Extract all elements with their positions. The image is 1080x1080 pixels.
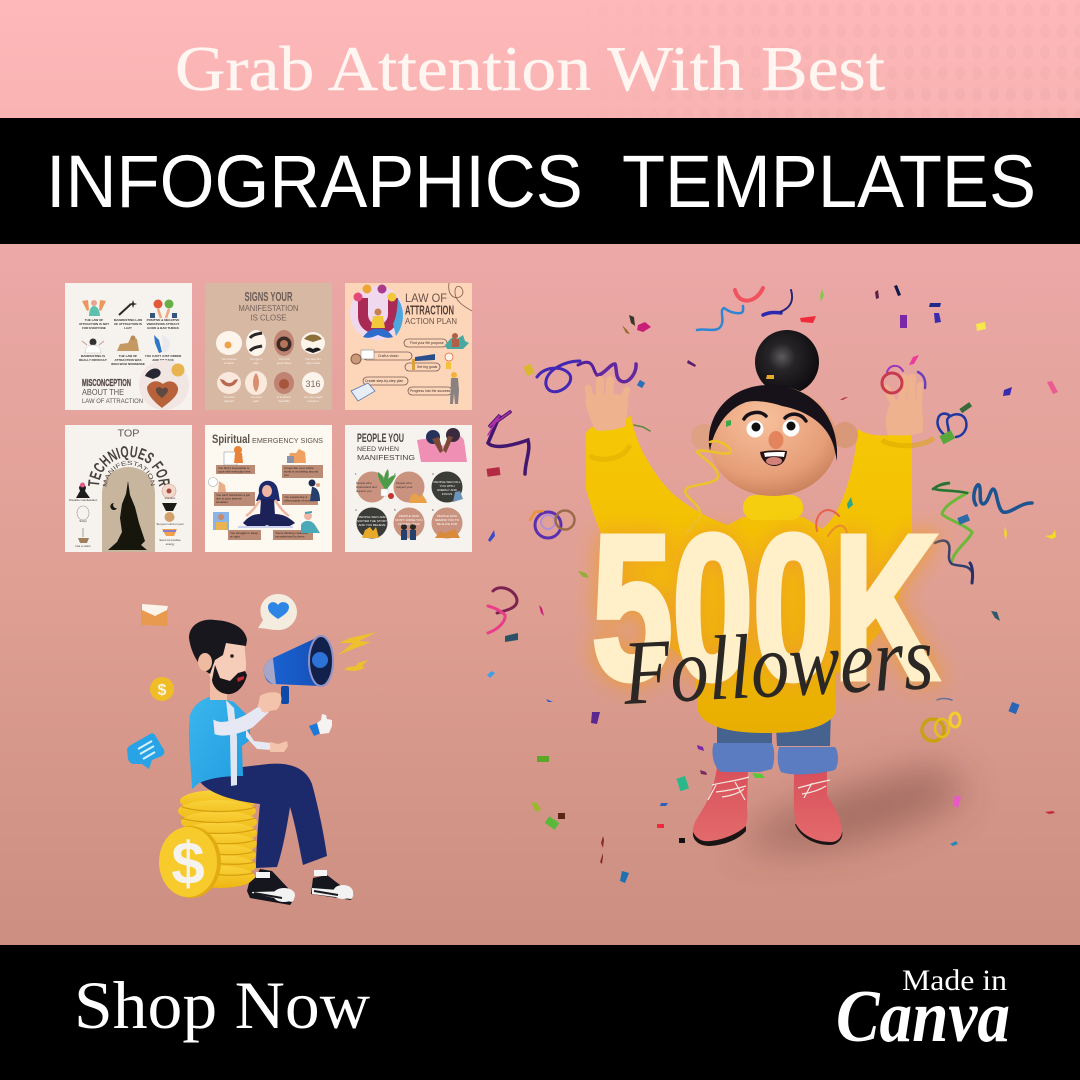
thumbnail 2: signs your manifestation: SIGNS YOUR — [244, 290, 292, 304]
thumbnail 2: signs your manifestation: You see the — [305, 357, 321, 361]
thumbnail 2: signs your manifestation: a vision — [224, 361, 234, 365]
illustration: man with megaphone on coins — [127, 594, 377, 905]
thumbnail 6: people you need when manifesting: DURING YOUR — [398, 522, 420, 526]
shadow under girl — [740, 765, 970, 849]
thumbnail 6: people you need when manifesting: PEOPLE WHO — [399, 514, 420, 518]
confetti: front layer — [487, 285, 1058, 883]
thumbnail 5: spiritual emergency signs: You find it impossible to — [218, 466, 250, 470]
coin stack — [178, 790, 257, 888]
girl nose — [768, 431, 784, 449]
thumbnail 2: signs your manifestation: You get a — [250, 357, 263, 361]
thumbnail 4: top techniques for manifestation: Visualize manifestation — [69, 498, 98, 502]
girl ears — [691, 422, 858, 450]
call to action: shop now: Shop Now — [74, 967, 370, 1043]
thumbnail 5: spiritual emergency signs — [205, 425, 332, 552]
thumbnail 1: misconception: POSITIVE & NEGATIVE — [147, 318, 179, 322]
thumbnail 4: top techniques for manifestation: Set your mind on your — [156, 522, 184, 526]
big number glow: 500K — [592, 493, 938, 722]
thumbnail 1: misconception: THE LAW OF — [119, 354, 137, 358]
thumbnail 5: spiritual emergency signs: anxieties — [216, 500, 228, 504]
thumbnail 2: signs your manifestation: beautiful — [278, 399, 290, 403]
icon: megaphone — [264, 636, 333, 704]
thumbnail 1: misconception: GOOD & BAD THINGS — [147, 326, 179, 330]
girl collar — [743, 495, 803, 520]
thumbnail 5: spiritual emergency signs: you — [284, 473, 289, 477]
thumbnail 6: people you need when manifesting: People who — [396, 481, 412, 485]
confetti: back layer — [488, 288, 1032, 741]
thumbnail 6: people you need when manifesting: NEED WHEN — [357, 446, 399, 453]
icon: big dollar coin — [159, 826, 221, 898]
thumbnail 3: law of attraction action plan: Create step-by-step plan — [365, 379, 403, 383]
thumbnail 5: spiritual emergency signs: It feels like your whole — [284, 466, 314, 470]
thumbnail 2: signs your manifestation: numbers — [307, 399, 319, 403]
girl face — [709, 386, 837, 496]
thumbnail 3: law of attraction action plan: ATTRACTION — [405, 304, 454, 318]
footer band — [0, 945, 1080, 1080]
thumbnail 2: signs your manifestation: calm — [253, 399, 260, 403]
script word: followers: Followers — [620, 606, 936, 724]
thumbnail 1: misconception: MISCONCEPTION — [82, 378, 131, 389]
icon: lightning bolts — [338, 632, 377, 671]
thumbnail 5: spiritual emergency signs: You struggle to sleep — [230, 531, 258, 535]
thumbnail 1: misconception: ATTRACTION WAS — [115, 358, 141, 362]
brand: made in canva: Canva — [836, 976, 1010, 1058]
thumbnail 5: spiritual emergency signs: EMERGENCY SIGNS — [252, 438, 323, 445]
girl right hand — [886, 378, 923, 435]
thumbnail 5: spiritual emergency signs: overwhelmed by them — [275, 534, 305, 538]
thumbnail 6: people you need when manifesting: YOU WITH — [440, 484, 454, 488]
thumbnail 5: spiritual emergency signs: You're thinking creatively — [275, 531, 308, 535]
thumbnail 1: misconception: ABOUT THE — [82, 388, 124, 397]
icon: big dollar coin: $ — [171, 830, 205, 897]
girl left hand — [586, 380, 628, 430]
icon: dollar coin small — [150, 677, 174, 701]
thumbnail 1: misconception: ATTRACTION IS NOT — [79, 322, 109, 326]
icon: dollar coin small: $ — [158, 682, 167, 699]
thumbnail 3: law of attraction action plan: LAW OF — [405, 291, 447, 305]
thumbnail 1: misconception: MANIFESTING LAW — [114, 318, 142, 322]
sneakers — [247, 869, 353, 905]
thumbnail 1: misconception: THE LAW OF — [85, 318, 103, 322]
thumbnail 1: misconception: MANIFESTING IS — [81, 354, 105, 358]
thumbnail 5: spiritual emergency signs: Spiritual — [212, 434, 250, 446]
thumbnail 2: signs your manifestation: sign — [253, 361, 259, 365]
girl shorts — [712, 708, 838, 774]
thumbnail 6: people you need when manifesting: respect your — [396, 485, 413, 489]
thumbnail 6: people you need when manifesting: 1 — [355, 472, 357, 476]
thumbnail 5: spiritual emergency signs: You can't hold down a job — [216, 493, 250, 497]
thumbnail 4: top techniques for manifestation: Send out positive — [159, 538, 181, 542]
girl bun — [755, 330, 819, 394]
thumbnail 4: top techniques for manifestation: Script — [79, 519, 87, 523]
thumbnail 6: people you need when manifesting: FOCUS — [442, 492, 452, 496]
thumbnail 2: signs your manifestation: good vibes — [277, 361, 292, 365]
thumbnail 4: top techniques for manifestation: MANIFESTATION — [102, 460, 156, 486]
icon: thumbs up — [309, 714, 332, 736]
thumbnail 2: signs your manifestation: You feel — [224, 395, 235, 399]
thumbnail 5: spiritual emergency signs: due to your intense — [216, 496, 242, 500]
panel: template thumbnails — [65, 283, 472, 552]
thumbnail 6: people you need when manifesting: SOFTER THE STORY — [357, 519, 387, 523]
thumbnail 2: signs your manifestation: MANIFESTATION — [238, 304, 299, 313]
thumbnail 2: signs your manifestation: aligned — [224, 399, 234, 403]
thumbnail 2: signs your manifestation: It is all too — [277, 395, 291, 399]
thumbnail 6: people you need when manifesting: PEOPLE WHO ARE — [358, 515, 386, 519]
thumbnail 1: misconception: FOR EVERYONE — [82, 326, 106, 330]
thumbnail 1: misconception — [65, 283, 192, 410]
girl character — [586, 330, 934, 846]
thumbnail 6: people you need when manifesting: MANIFESTING — [357, 455, 415, 462]
halftone dots — [570, 0, 1080, 118]
brand: made in canva: Made in — [902, 964, 1007, 997]
thumbnail 1: misconception: REALLY DIFFICULT — [79, 358, 107, 362]
thumbnail 6: people you need when manifesting: 4 — [355, 508, 357, 512]
thumbnail 6: people you need when manifesting: People who — [356, 481, 372, 485]
thumbnail 2: signs your manifestation — [205, 283, 332, 410]
banner: infographics templates — [0, 118, 1080, 244]
thumbnail 3: law of attraction action plan: Set big goals — [417, 365, 437, 369]
thumbnail 2: signs your manifestation: You find — [279, 357, 290, 361]
thumbnail 6: people you need when manifesting: DON'T JUDGE YOU — [395, 518, 423, 522]
banner: infographics templates: INFOGRAPHICS TEMPLATES — [46, 140, 1036, 223]
thumbnail 2: signs your manifestation: 316 — [305, 379, 321, 389]
thumbnail 6: people you need when manifesting: ENERGY AND — [437, 488, 458, 492]
thumbnail 1: misconception: YOU CAN'T JUST ORDER — [145, 354, 182, 358]
thumbnail 5: spiritual emergency signs: world is crumbling around — [284, 470, 319, 474]
thumbnail 6: people you need when manifesting: 2 — [394, 472, 396, 476]
thumbnail 6: people you need when manifesting: support you — [356, 489, 372, 493]
thumbnail 3: law of attraction action plan — [345, 283, 472, 410]
thumbnail 1: misconception: WOO-WOO NONSENSE — [111, 362, 145, 366]
thumbnail 6: people you need when manifesting: understand and — [356, 485, 377, 489]
thumbnail 2: signs your manifestation: You see angel — [304, 395, 323, 399]
thumbnail 2: signs your manifestation: You receive — [221, 357, 237, 361]
girl hair — [709, 385, 837, 461]
girl eyes and brows — [744, 412, 806, 438]
thumbnail 6: people you need when manifesting: 5 — [394, 508, 396, 512]
thumbnail 1: misconception: AND SIT BACK — [152, 358, 175, 362]
girl boots — [693, 767, 842, 846]
title: grab attention: Grab Attention With Best — [175, 33, 885, 104]
thumbnail 4: top techniques for manifestation: TOP — [118, 428, 140, 440]
thumbnail 5: spiritual emergency signs: rollercoaster of emotions — [284, 498, 317, 502]
thumbnail 6: people you need when manifesting: REMIND YOU TO — [435, 518, 460, 522]
thumbnail 3: law of attraction action plan: Find your life purpose — [410, 341, 444, 345]
thumbnail 6: people you need when manifesting: PEOPLE YOU — [357, 433, 404, 445]
thumbnail 4: top techniques for manifestation: Intention — [165, 496, 176, 500]
girl sweater — [586, 416, 912, 733]
thumbnail 4: top techniques for manifestation: TECHNIQUES FOR — [88, 446, 170, 487]
icon: envelope — [141, 604, 168, 626]
thumbnail 5: spiritual emergency signs: cope with everyday lives — [218, 470, 251, 474]
thumbnail 2: signs your manifestation: You feel — [251, 395, 262, 399]
thumbnail 2: signs your manifestation: IS CLOSE — [250, 314, 286, 322]
thumbnail 6: people you need when manifesting: PEOPLE WHO — [437, 514, 458, 518]
head and beard — [189, 620, 247, 700]
arms — [215, 695, 288, 752]
girl mouth — [760, 450, 787, 466]
thumbnail 5: spiritual emergency signs: You experience a — [284, 495, 307, 499]
thumbnail 6: people you need when manifesting: 6 — [432, 508, 434, 512]
thumbnail 1: misconception: OF ATTRACTION IS — [114, 322, 142, 326]
thumbnail 4: top techniques for manifestation: energy — [166, 542, 175, 546]
thumbnail 3: law of attraction action plan: Craft a vision — [378, 354, 398, 358]
thumbnail 3: law of attraction action plan: Progress into the success — [410, 389, 450, 393]
thumbnail 2: signs your manifestation: signs clear — [306, 361, 320, 365]
thumbnail 1: misconception: LAZY — [124, 326, 132, 330]
hand on megaphone — [258, 692, 281, 713]
thumbnail 1: misconception: LAW OF ATTRACTION — [82, 398, 143, 405]
thumbnail 6: people you need when manifesting: 3 — [432, 472, 434, 476]
icon: heart speech bubble — [258, 594, 297, 630]
thumbnail 3: law of attraction action plan: ACTION PLAN — [405, 317, 457, 326]
shirt — [189, 696, 250, 789]
thumbnail 6: people you need when manifesting: PEOPLE WHO FILL — [433, 480, 461, 484]
thumbnail 1: misconception: VIBRATIONS ATTRACT — [147, 322, 180, 326]
thumbnail 4: top techniques for manifestation — [65, 425, 192, 552]
trousers — [198, 764, 327, 868]
icon: chat bubble — [127, 733, 164, 769]
thumbnail 4: top techniques for manifestation: Use a vision — [75, 544, 91, 548]
thumbnail 6: people you need when manifesting — [345, 425, 472, 552]
thumbnail 5: spiritual emergency signs: at night — [230, 534, 240, 538]
big number: 500K: 500K — [592, 493, 938, 722]
thumbnail 6: people you need when manifesting: BE ALIVE FOR — [437, 522, 458, 526]
thumbnail 6: people you need when manifesting: AND YOU BELIEVE — [359, 523, 385, 527]
